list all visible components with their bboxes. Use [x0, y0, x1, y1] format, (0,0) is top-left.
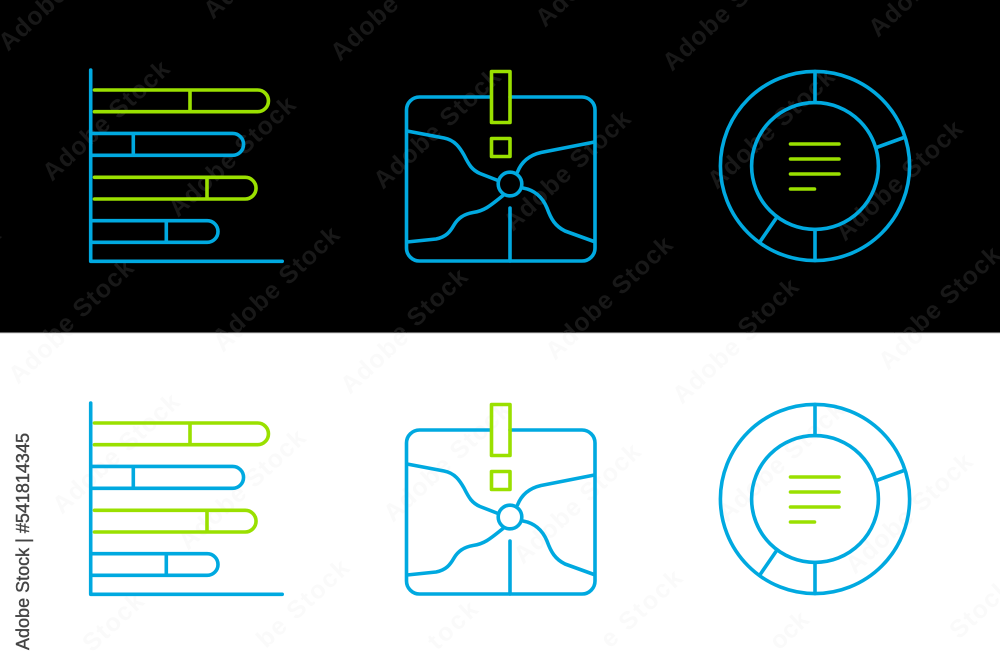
watermark: white panel: ock [764, 606, 815, 655]
watermark: white panel: Stock [77, 587, 150, 657]
watermark: white panel: Adobe Stock [335, 268, 473, 399]
icon: donut chart on black [720, 71, 910, 261]
text: stock id caption: Adobe Stock | #541814345 [12, 433, 33, 650]
watermark: black panel: Adobe Stock [498, 105, 636, 236]
watermark: black panel: Adobe Stock [1, 254, 139, 385]
watermark: white panel: Adobe Stock [712, 396, 850, 527]
panel: black background [0, 0, 1000, 333]
watermark: white panel: tock [422, 595, 484, 655]
watermark: black panel: Adobe Stock [335, 263, 473, 394]
icon: donut chart on white [720, 404, 910, 594]
watermark: black panel: Adobe Stock [163, 91, 301, 222]
icon: map with warning on black [406, 72, 595, 261]
watermark: black panel: Adobe Stock [830, 115, 968, 246]
watermark: white panel: Adobe Stock [47, 388, 185, 519]
icon: bar chart on black [91, 70, 282, 261]
icon: map with warning on white [406, 404, 595, 594]
watermark: white panel: e Stock [595, 564, 688, 653]
watermark: black panel: Adobe Stock [207, 221, 345, 352]
watermark: black panel: Adobe Stock [368, 63, 506, 194]
icon: bar chart on white [91, 403, 282, 594]
watermark: white panel: Adobe Stock [378, 396, 516, 527]
watermark: black panel [0, 0, 1000, 333]
watermark: white panel: Adobe Stock [3, 258, 141, 389]
watermark: white panel: Adobe Stock [173, 424, 311, 555]
watermark: white panel: Adobe Stock [540, 234, 678, 365]
watermark: white panel: be Stock [251, 554, 355, 653]
panel: white background [0, 333, 1000, 666]
watermark: white panel: Adobe Stock [667, 278, 805, 409]
watermark: white panel: Adobe Stock [208, 226, 346, 357]
watermark: black panel: Adobe Stock [666, 273, 804, 404]
watermark: black panel: Adobe Stock [37, 55, 175, 186]
watermark: white panel: Adobe Stock [508, 438, 646, 569]
watermark: black panel: Adobe Stock [540, 231, 678, 362]
watermark: black panel: Adobe Stock [702, 63, 840, 194]
watermark: white panel [15, 413, 912, 650]
watermark: white panel: Adobe Stock [840, 448, 978, 579]
